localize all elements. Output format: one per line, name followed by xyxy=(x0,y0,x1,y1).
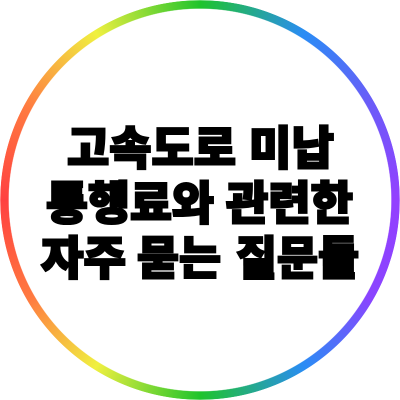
title line 3: 묻는 xyxy=(137,232,221,284)
title line 2: 통행료와 xyxy=(46,178,214,230)
title line 1 xyxy=(67,122,334,174)
title line 2: 관련한 xyxy=(226,178,353,230)
title line 3 xyxy=(41,232,359,284)
title line 1: 미납 xyxy=(249,122,334,174)
title line 2 xyxy=(46,178,353,230)
title line 3: 자주 xyxy=(41,232,126,284)
title line 3: 질문들 xyxy=(236,232,359,284)
title line 1: 고속도로 xyxy=(67,122,236,174)
